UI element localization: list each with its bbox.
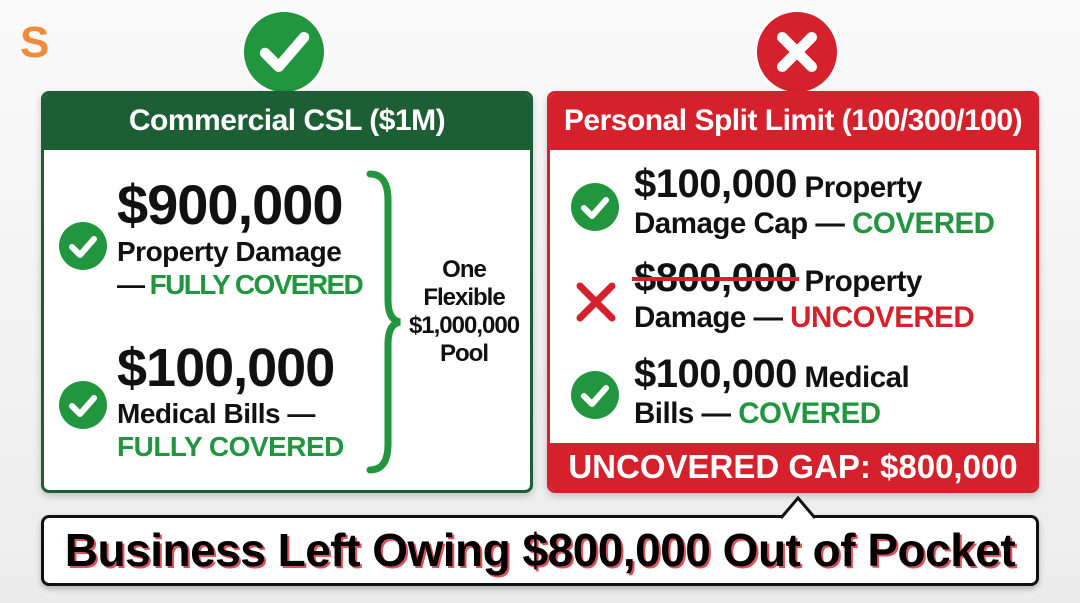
text: medical [634,352,909,430]
panel: commercial CSL [41,91,533,493]
text: 900k: Property Damage [117,236,341,267]
text: 100k medical: FULLY COVERED [117,431,344,462]
icon: big check [241,9,327,95]
text: uncovered [632,256,974,334]
heading: personal: Personal Split Limit (100/300/100) [564,104,1022,137]
text: property cap [634,162,994,240]
text: medical: Bills — COVERED [634,397,881,430]
text: pool: $1,000,000 [409,312,519,339]
callout [41,515,1039,586]
text: 900k: — FULLY COVERED [117,269,362,300]
heading: commercial: Commercial CSL ($1M) [129,104,445,137]
icon: check b [571,371,619,419]
text: 100k medical: $100,000 [117,338,334,398]
text: uncovered: Damage — UNCOVERED [634,301,974,334]
text: pool: Flexible [423,284,505,311]
callout: Business Left Owing $800,000 Out of Pocket [65,524,1015,576]
arrow: pointer [781,496,815,519]
text: pool [409,256,520,367]
icon: check 1 [59,222,107,270]
icon: check 2 [59,381,107,429]
icon: check a [571,183,619,231]
text: 100k medical: Medical Bills — [117,398,315,429]
heading: commercial [41,91,533,150]
text: 900k: $900,000 [117,173,343,236]
heading: personal [547,91,1039,150]
logo: S [20,18,49,67]
footer: gap: UNCOVERED GAP: $800,000 [568,448,1018,485]
text: uncovered: $800,000 Property [634,256,922,300]
icon: red x [576,282,616,322]
footer: gap [547,443,1039,493]
panel: personal split [547,91,1039,493]
text: 900k [117,173,363,300]
text: medical: $100,000 Medical [634,352,909,396]
text: property cap: $100,000 Property [634,162,922,206]
text: property cap: Damage Cap — COVERED [634,207,994,240]
icon: big x [754,9,840,95]
text: pool: Pool [440,340,488,367]
bracket [366,170,401,474]
text: 100k medical [117,338,344,462]
text: pool: One [442,256,486,283]
